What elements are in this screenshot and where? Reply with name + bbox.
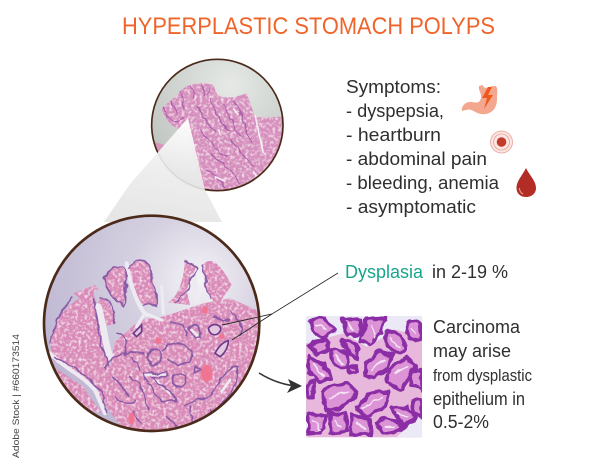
- carcinoma micrograph: [306, 316, 422, 437]
- white clefts: [50, 263, 230, 413]
- dysplastic glands circled: [133, 325, 228, 357]
- pale gland lumen background: [306, 316, 422, 437]
- dysplasia label: in 2-19 %: [432, 262, 508, 282]
- small circular micrograph: [152, 59, 287, 193]
- symptoms text block: - asymptomatic: [346, 197, 476, 217]
- title: HYPERPLASTIC STOMACH POLYPS: [122, 13, 495, 40]
- zoom cone connecting the circles: [104, 118, 222, 222]
- tissue section low magnification: [162, 83, 287, 193]
- icon: abdominal pain target: [490, 131, 512, 153]
- carcinoma text block: 0.5-2%: [433, 412, 489, 432]
- icon: stomach: [462, 85, 497, 114]
- pale lumen slits: [215, 108, 263, 181]
- symptoms text block: [346, 77, 500, 217]
- gland lumens: [313, 323, 417, 430]
- carcinoma text block: from dysplastic: [433, 366, 532, 385]
- carcinoma text block: Carcinoma: [433, 317, 521, 337]
- arrow to carcinoma micrograph: [259, 373, 302, 393]
- symptoms text block: - heartburn: [346, 125, 441, 145]
- gland texture: [163, 85, 253, 187]
- polyp tissue body: [50, 260, 263, 437]
- dysplasia label: [345, 262, 508, 282]
- icon: blood drop: [516, 168, 536, 197]
- faint lower-left tissue: [155, 142, 164, 152]
- dysplasia label: Dysplasia: [345, 262, 424, 282]
- carcinoma text block: epithelium in: [433, 389, 525, 409]
- large circular micrograph: [44, 216, 263, 437]
- carcinoma text block: [433, 317, 532, 432]
- red vessels: [128, 306, 225, 424]
- leader lines to dysplastic glands: [222, 273, 338, 340]
- symptoms text block: - bleeding, anemia: [346, 173, 500, 193]
- purple gland outlines: [50, 260, 241, 427]
- malignant glands: [307, 318, 422, 435]
- symptoms text block: - abdominal pain: [346, 149, 487, 169]
- vertical stock credit: Adobe Stock | #660173514: [11, 334, 21, 458]
- symptoms text block: - dyspepsia,: [346, 101, 444, 121]
- symptoms text block: Symptoms:: [346, 77, 441, 97]
- carcinoma text block: may arise: [433, 341, 511, 361]
